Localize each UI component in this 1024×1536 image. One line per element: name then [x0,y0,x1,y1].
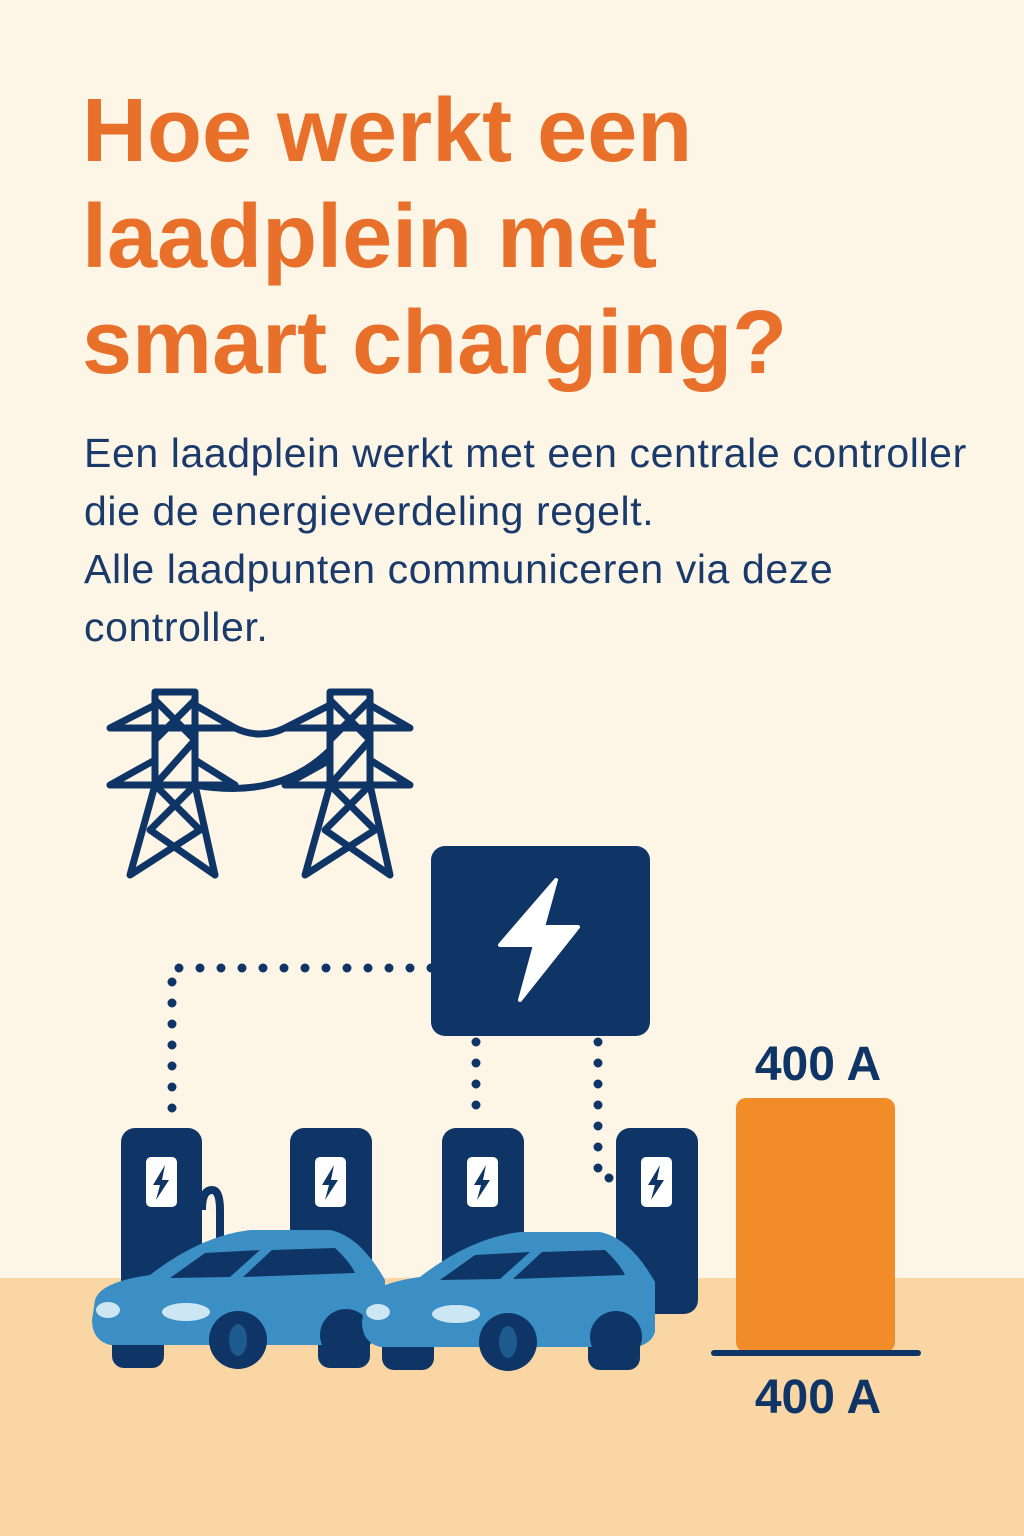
title: laadplein met [82,187,657,287]
intro text [84,430,967,650]
intro text: Een laadplein werkt met een centrale controller [84,430,967,476]
bar chart: 400 A: 400 A [755,1038,881,1091]
bar chart: 400 A [714,1038,918,1424]
cars [92,1230,385,1369]
ground [0,1278,1024,1536]
icon: lightning bolt [500,880,578,1000]
controller [431,846,650,1036]
charging stations [121,1128,698,1314]
icon: power towers [110,692,410,875]
intro text: controller. [84,604,268,650]
dotted connections [172,968,615,1178]
bar chart: 400 A: 400 A [755,1371,881,1424]
title [82,81,787,393]
intro text: Alle laadpunten communiceren via deze [84,546,833,592]
title: smart charging? [82,293,787,393]
title: Hoe werkt een [82,81,692,181]
intro text: die de energieverdeling regelt. [84,488,654,534]
